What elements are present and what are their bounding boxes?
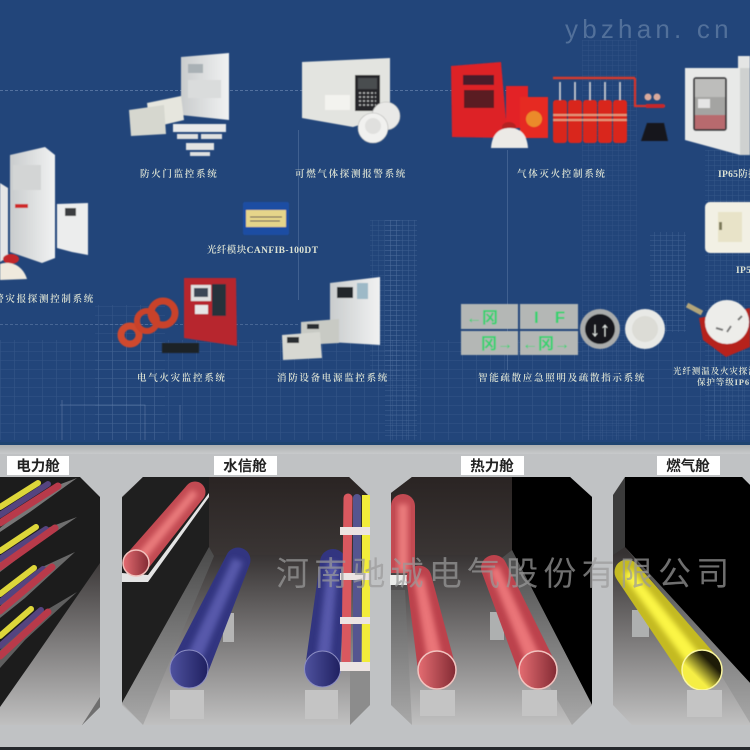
chamber labels: 燃气舱 (666, 457, 710, 475)
captions: system names: 电气火灾监控系统 (137, 372, 227, 384)
chamber labels (7, 456, 720, 475)
device: fiber module (243, 202, 289, 235)
watermark: ybzhan.cn: ybzhan. cn (565, 14, 733, 44)
watermark: company name: 河南驰诚电气股份有限公司 (276, 555, 734, 592)
pipe: blue right (304, 549, 346, 687)
device: gas extinguishing system (451, 62, 668, 148)
captions: system names: 可燃气体探测报警系统 (295, 168, 407, 180)
pipe: yellow gas (614, 560, 722, 690)
support: rear gas (632, 610, 649, 637)
device: combustible gas panel (302, 58, 400, 143)
pipe: heat left (406, 566, 456, 689)
background: blue panel (0, 0, 750, 444)
devices: all product images (0, 53, 750, 360)
device: evacuation signs: ←冈 (466, 310, 498, 327)
support: gas pipe (687, 690, 722, 717)
pipe: heat right (481, 555, 557, 689)
device: IP55 module (705, 202, 750, 253)
device: evacuation signs: ←冈→ (522, 336, 570, 353)
captions: system names: 消防设备电源监控系统 (277, 372, 389, 384)
chamber labels: 电力舱 (16, 457, 60, 475)
captions: system names: 智能疏散应急照明及疏散指示系统 (478, 372, 646, 384)
support: rear heat (490, 612, 504, 640)
chamber: power (0, 477, 100, 725)
device: power supply monitor (282, 277, 380, 360)
support: back (223, 613, 234, 642)
supports: heat pipes (420, 690, 455, 716)
section: utility tunnel (0, 442, 750, 750)
device: evacuation signs: ↓↑ (590, 319, 610, 341)
captions: system names: 气体灭火控制系统 (517, 168, 607, 180)
chamber: water and telecom (122, 477, 370, 725)
device: explosion-proof detector (687, 300, 750, 357)
chamber: heat (390, 477, 592, 725)
pipe: red wall pipe (122, 482, 209, 582)
device: evacuation signs: 冈→ (481, 336, 513, 353)
chamber: gas (613, 477, 750, 725)
captions: system names: 光纤模块CANFIB-100DT (207, 244, 319, 256)
cables: four shelves (0, 483, 58, 656)
pipe: blue left (170, 548, 250, 688)
device: evacuation signs (461, 304, 665, 355)
device: electrical fire monitor (121, 278, 237, 353)
device: IP65 enclosure (685, 56, 750, 155)
background: city wireframe (0, 40, 750, 440)
chamber labels: 热力舱 (470, 457, 514, 475)
pipe: heat wall (390, 494, 415, 585)
supports: blue pipes (170, 690, 204, 719)
captions: system names (0, 168, 750, 387)
chamber labels: 水信舱 (223, 457, 267, 475)
device: fire alarm cabinet (0, 147, 88, 280)
device: evacuation signs: IF (534, 308, 581, 327)
device: fire door monitor (129, 53, 229, 156)
cable tray: right wall (340, 495, 370, 671)
captions: system names: 防火门监控系统 (140, 168, 218, 180)
